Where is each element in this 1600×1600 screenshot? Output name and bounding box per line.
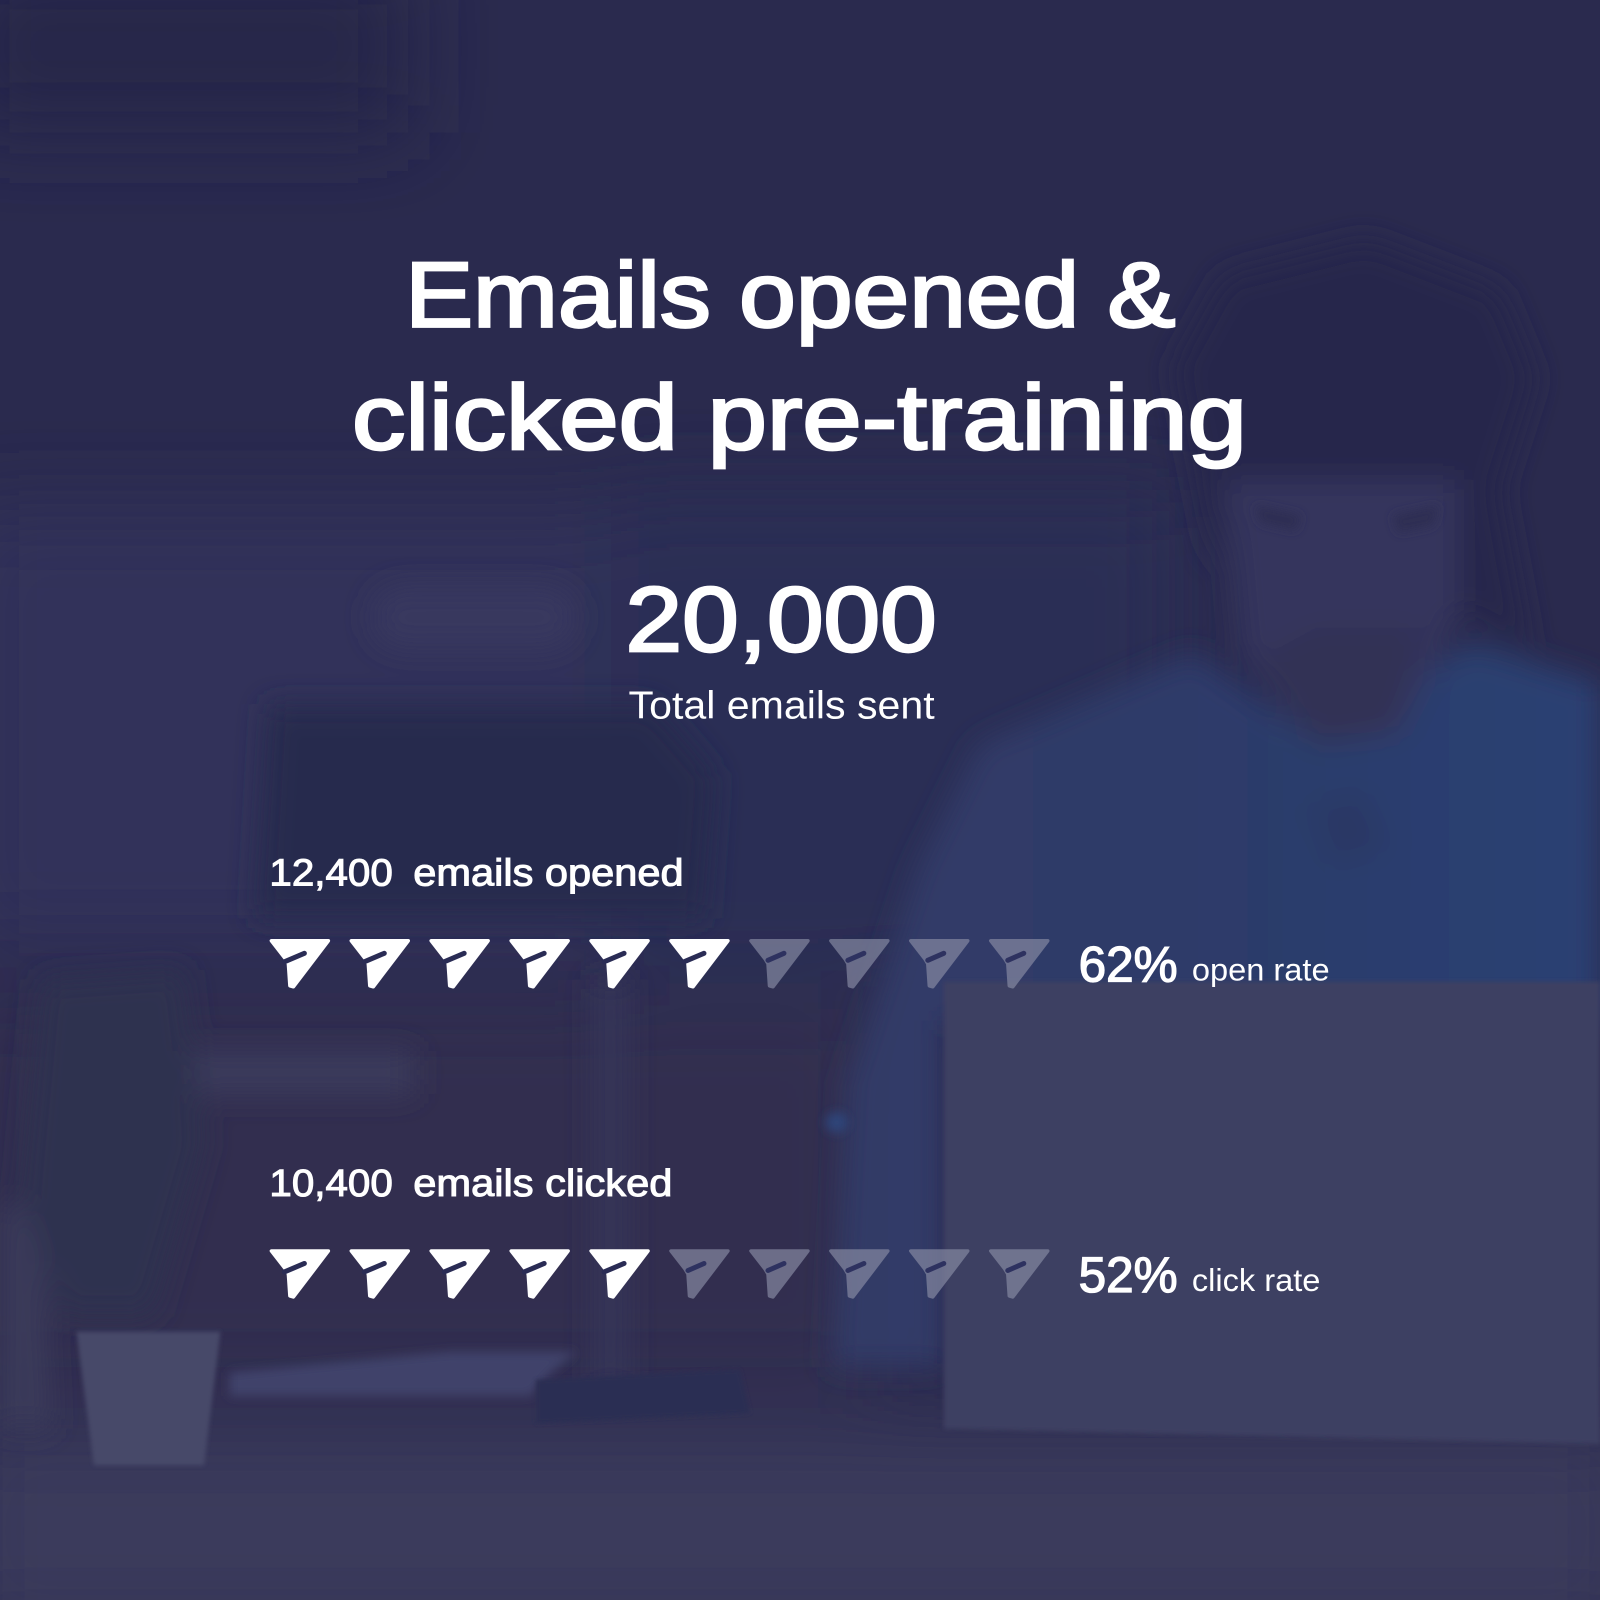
stat: open rate: open rate xyxy=(1192,952,1330,988)
stat: click rate: 52% xyxy=(1079,1247,1178,1303)
stat: open rate xyxy=(1079,937,1330,993)
stat: open rate: 62% xyxy=(1079,937,1178,993)
row: emails clicked xyxy=(269,1162,1320,1303)
row: emails opened xyxy=(269,852,1330,993)
icon row: 6 of 10 emails opened xyxy=(271,941,1048,987)
label: emails clicked: 10,400 xyxy=(269,1162,393,1204)
icon row: 5 of 10 emails clicked xyxy=(271,1251,1048,1297)
title: Emails opened & xyxy=(405,245,1176,347)
total emails stat xyxy=(626,569,937,727)
label: emails clicked: emails clicked xyxy=(413,1162,672,1204)
total emails stat: 20,000 xyxy=(626,569,937,671)
title: clicked pre-training xyxy=(352,367,1247,469)
label: emails opened xyxy=(269,852,684,894)
label: emails opened: emails opened xyxy=(413,852,684,894)
total emails stat: Total emails sent xyxy=(629,684,935,727)
title xyxy=(352,245,1247,469)
stat: click rate: click rate xyxy=(1192,1262,1320,1298)
stat: click rate xyxy=(1079,1247,1320,1303)
label: emails opened: 12,400 xyxy=(269,852,393,894)
label: emails clicked xyxy=(269,1162,672,1204)
